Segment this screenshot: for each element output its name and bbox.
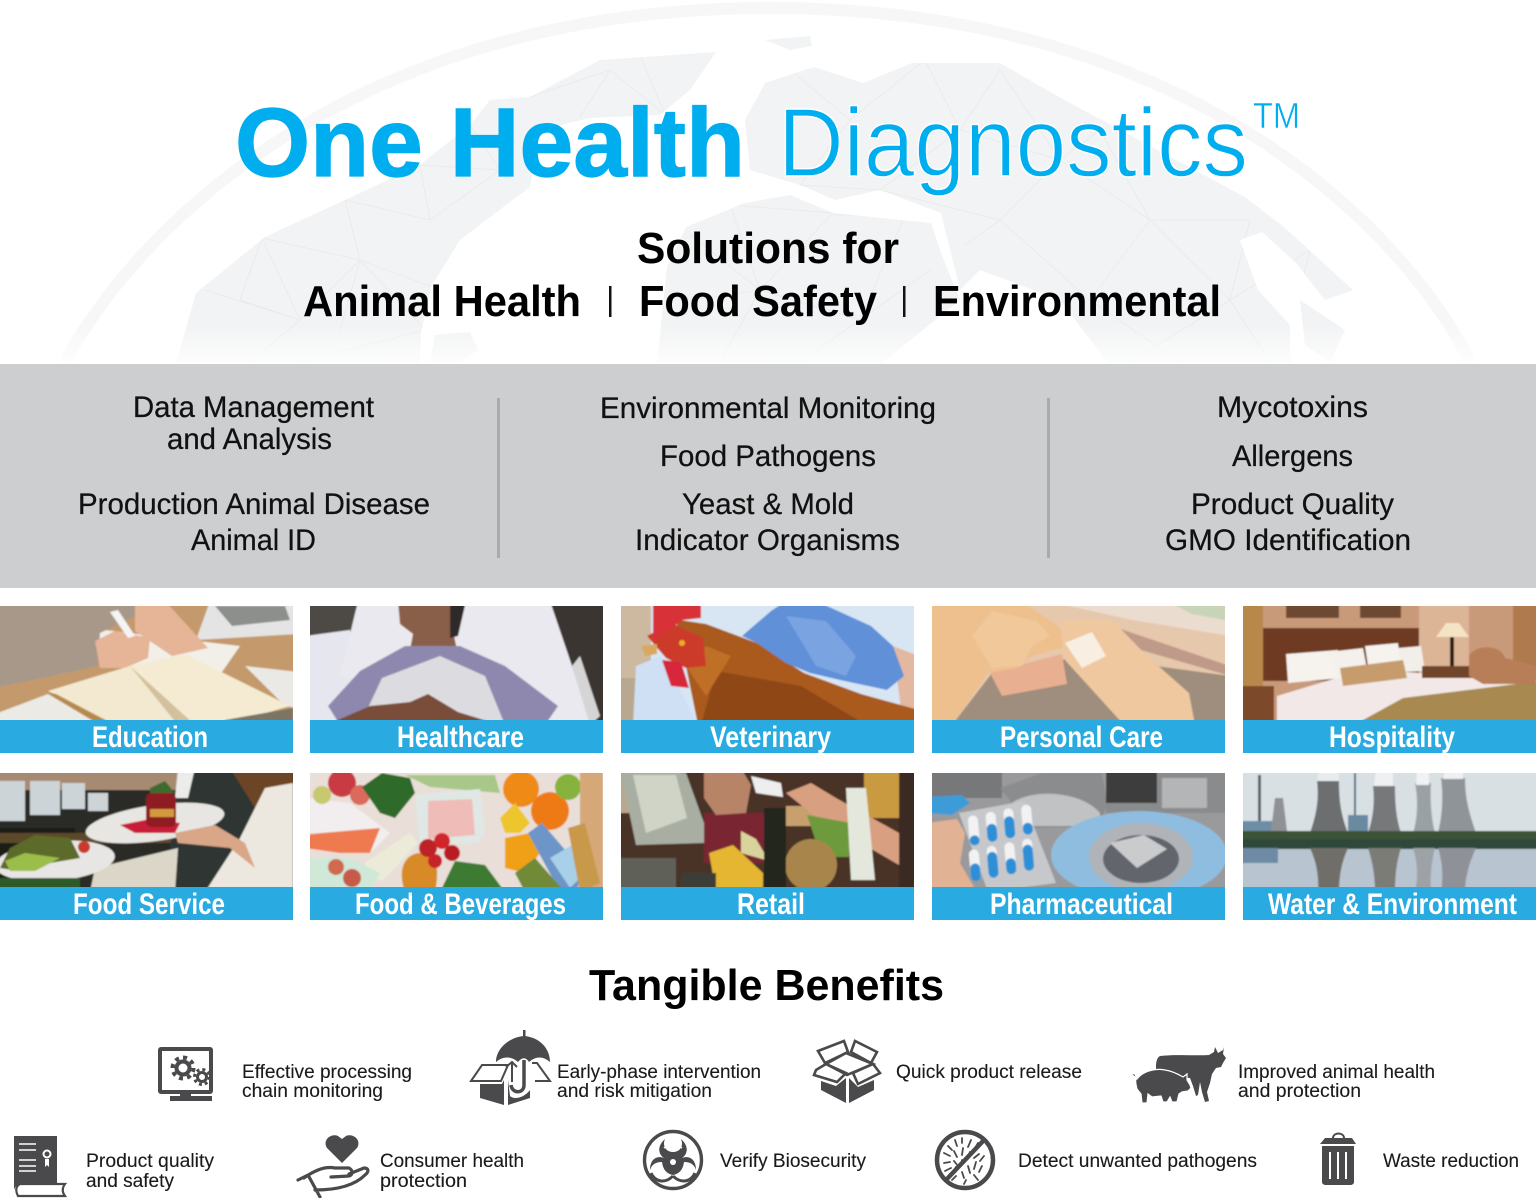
benefit: early-phase intervention: and risk mitigation	[557, 1081, 712, 1102]
column: environmental topics: Allergens	[1232, 440, 1353, 473]
heading: tangible benefits: Tangible Benefits	[589, 961, 944, 1010]
tile: Education: Education	[92, 721, 208, 754]
column: environmental topics: Mycotoxins	[1217, 391, 1368, 424]
column: food safety topics	[600, 392, 936, 557]
benefit: verify biosecurity: Verify Biosecurity	[720, 1151, 866, 1172]
column: animal health topics: Animal ID	[191, 524, 316, 557]
icon: cow and pig	[1130, 1047, 1226, 1103]
tile: Personal Care	[927, 601, 1230, 754]
icon: biohazard	[644, 1132, 702, 1188]
benefit: improved animal health: Improved animal health	[1238, 1062, 1435, 1083]
icon: hand holding heart	[298, 1135, 368, 1197]
tile: Education	[0, 601, 298, 754]
title: Diagnostics	[778, 88, 1248, 197]
column: animal health topics: Data Management	[133, 391, 375, 424]
benefit: verify biosecurity	[644, 1132, 866, 1188]
benefit: consumer health: protection	[380, 1171, 467, 1192]
tile: Veterinary	[616, 601, 919, 754]
column: food safety topics: Indicator Organisms	[635, 524, 900, 557]
icon: open box	[814, 1041, 880, 1103]
column: animal health topics: and Analysis	[167, 423, 332, 456]
tile: Food & Beverages	[305, 768, 608, 921]
tile: Pharmaceutical: Pharmaceutical	[990, 888, 1173, 921]
subtitle: Solutions for	[637, 224, 899, 273]
tile: Personal Care: Personal Care	[1000, 721, 1163, 754]
tile: Food Service: Food Service	[73, 888, 225, 921]
tile: Healthcare: Healthcare	[397, 721, 524, 754]
subtitle: Environmental	[933, 277, 1221, 326]
panel: grey solutions band	[0, 364, 1536, 588]
tile: Retail	[616, 768, 919, 921]
benefit: early-phase intervention	[471, 1030, 761, 1105]
column: environmental topics	[1165, 391, 1411, 557]
column: food safety topics: Environmental Monitoring	[600, 392, 936, 425]
column: environmental topics: Product Quality	[1191, 488, 1394, 521]
tile: Healthcare	[305, 601, 608, 754]
tile: Hospitality	[1238, 601, 1536, 754]
benefit: quick product release	[814, 1041, 1082, 1103]
benefit: waste reduction: Waste reduction	[1383, 1151, 1519, 1172]
column: animal health topics	[78, 391, 430, 557]
benefit: product quality	[14, 1136, 215, 1196]
benefit: effective processing: Effective processing	[242, 1062, 412, 1083]
tile: Water & Environment	[1238, 768, 1536, 921]
title	[235, 88, 1300, 197]
benefit: consumer health: Consumer health	[380, 1151, 524, 1172]
benefit: detect pathogens	[937, 1132, 1257, 1188]
icon: umbrella over box	[471, 1030, 550, 1105]
benefit: consumer health	[298, 1135, 524, 1197]
benefit: effective processing	[160, 1049, 412, 1102]
benefit: waste reduction	[1320, 1134, 1519, 1185]
icon: crossed-out pathogens	[937, 1132, 993, 1188]
icon: monitor with gears	[160, 1049, 212, 1101]
benefit: product quality: Product quality	[86, 1151, 215, 1172]
tile: Food Service	[0, 768, 298, 921]
icon: certificate book	[14, 1136, 65, 1196]
world map backdrop	[182, 36, 1352, 354]
subtitle: Animal Health	[303, 277, 581, 326]
tile: Veterinary: Veterinary	[710, 721, 831, 754]
tile: Food & Beverages: Food & Beverages	[355, 888, 566, 921]
tile: Pharmaceutical	[927, 768, 1230, 921]
subtitle	[303, 224, 1221, 326]
benefit: quick product release: Quick product release	[896, 1062, 1082, 1083]
column: environmental topics: GMO Identification	[1165, 524, 1411, 557]
title: One Health	[235, 88, 745, 197]
tile: Hospitality: Hospitality	[1329, 721, 1455, 754]
title: TM	[1253, 95, 1300, 136]
benefit: improved animal health: and protection	[1238, 1081, 1361, 1102]
benefit: effective processing: chain monitoring	[242, 1081, 383, 1102]
icon: trash can	[1320, 1134, 1356, 1185]
column: food safety topics: Food Pathogens	[660, 440, 876, 473]
benefit: detect pathogens: Detect unwanted pathogens	[1018, 1151, 1257, 1172]
benefit: product quality: and safety	[86, 1171, 175, 1192]
tile: Retail: Retail	[737, 888, 805, 921]
column: food safety topics: Yeast & Mold	[682, 488, 854, 521]
benefit: early-phase intervention: Early-phase intervention	[557, 1062, 761, 1083]
benefit: improved animal health	[1130, 1047, 1435, 1103]
column: animal health topics: Production Animal Disease	[78, 488, 430, 521]
subtitle: Food Safety	[639, 277, 878, 326]
